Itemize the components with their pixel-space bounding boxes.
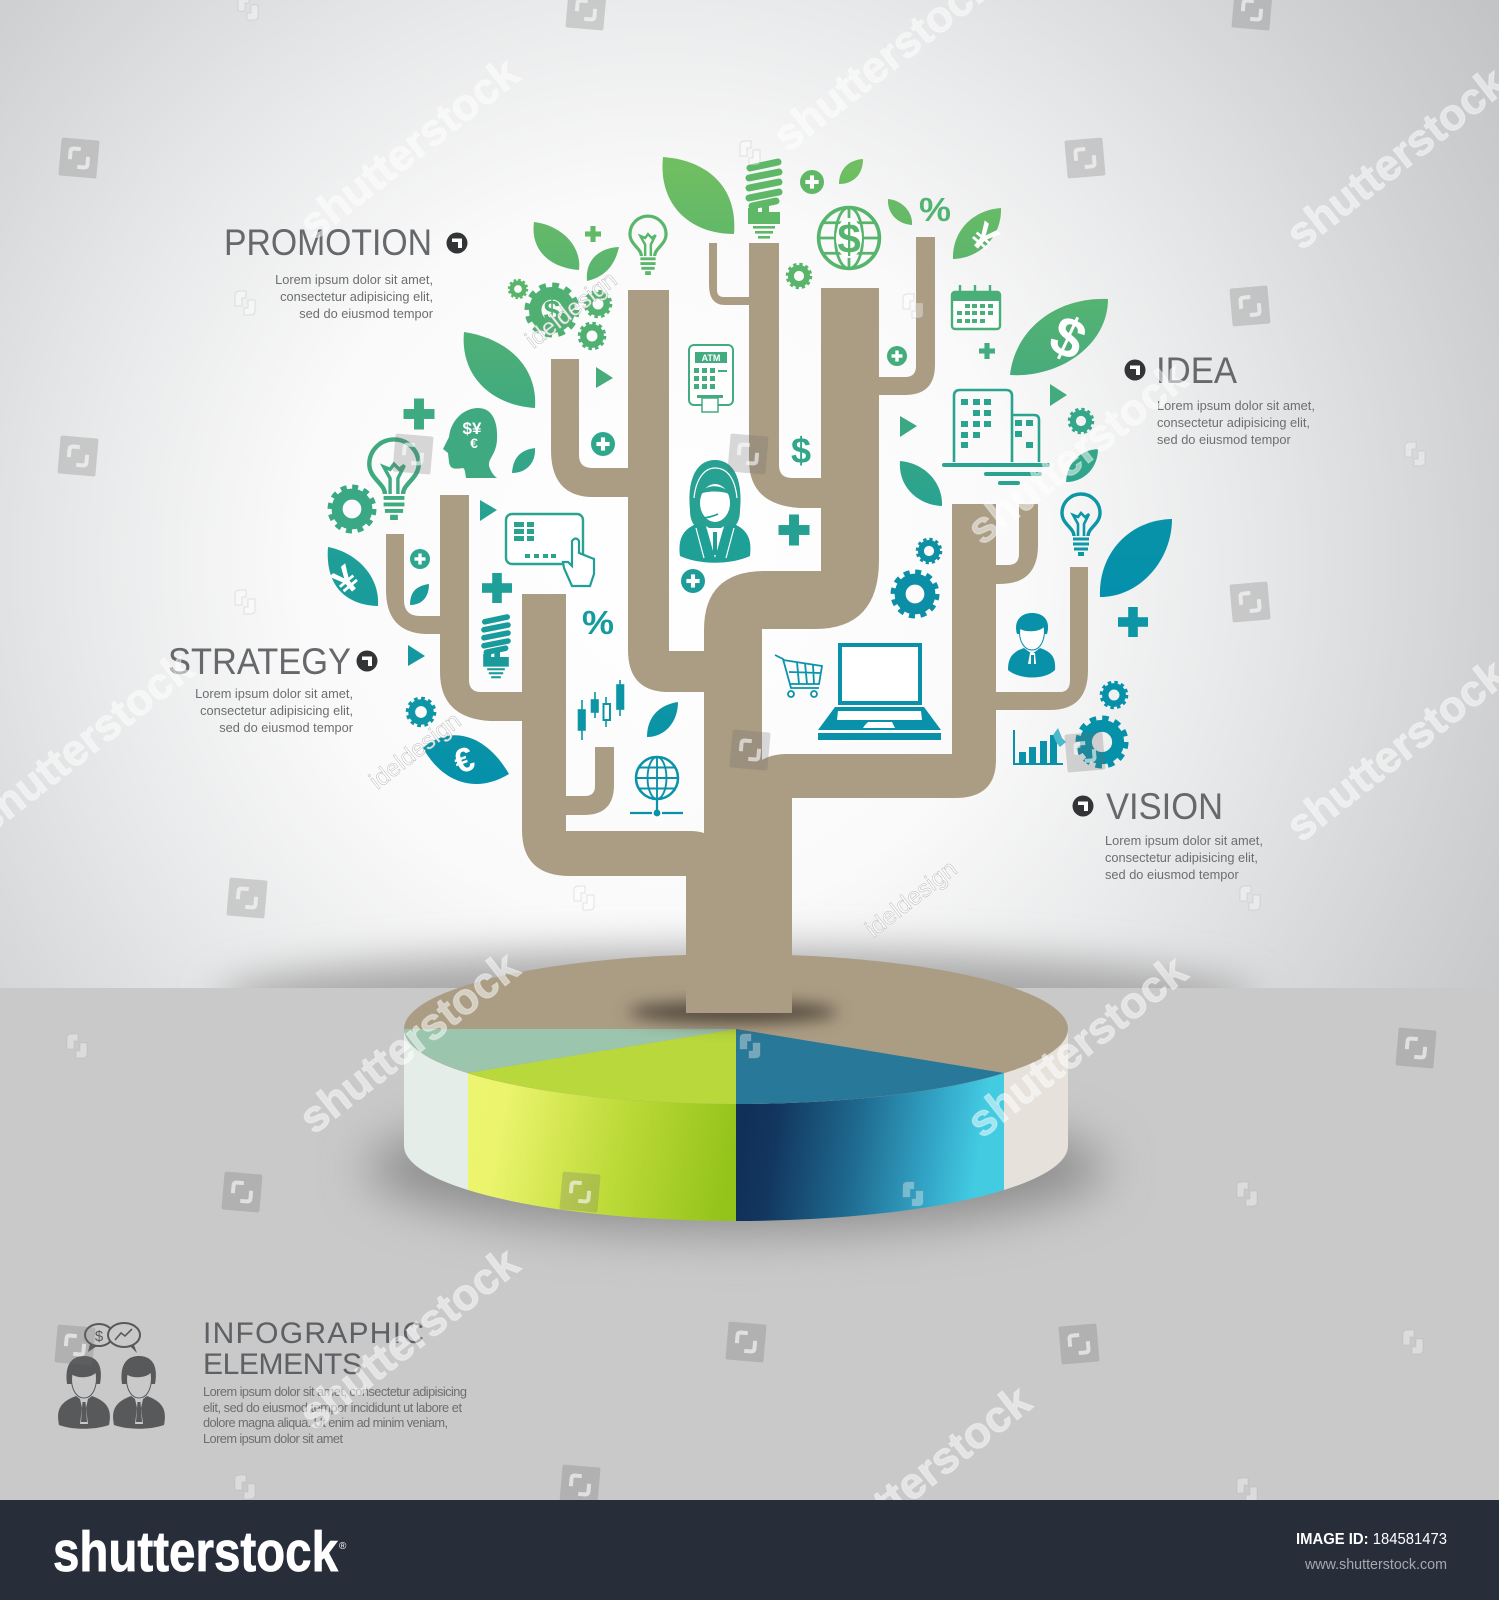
icon: money gear xyxy=(527,285,577,335)
label: vision: consectetur adipisicing elit, xyxy=(1105,850,1258,865)
icon: globe dollar xyxy=(819,208,879,268)
label: promotion: PROMOTION xyxy=(224,222,432,263)
gears xyxy=(330,264,1127,766)
triangles xyxy=(408,367,1067,666)
heading: infographic elements xyxy=(203,1317,424,1381)
icon: calendar xyxy=(952,285,1000,329)
text: infographic description: Lorem ipsum dolor sit amet xyxy=(203,1431,343,1446)
tree xyxy=(386,237,1088,1013)
pie side: blue xyxy=(736,1073,1004,1221)
icon: head with currency: $¥ xyxy=(463,419,482,438)
pie side: pale green xyxy=(404,1029,468,1190)
icon: shopping cart xyxy=(775,655,822,697)
trunk shadow xyxy=(628,1001,838,1023)
pie side: lime xyxy=(468,1073,736,1221)
label: strategy: consectetur adipisicing elit, xyxy=(200,703,353,718)
label: strategy: STRATEGY xyxy=(168,641,351,682)
text: infographic description: elit, sed do eiusmod tempor incididunt ut labore et xyxy=(203,1400,462,1415)
watermark text: shutterstock xyxy=(802,1376,1041,1577)
website: www.shutterstock.com xyxy=(1304,1556,1447,1573)
registered mark: ® xyxy=(339,1541,347,1552)
label: promotion: Lorem ipsum dolor sit amet, xyxy=(275,272,433,287)
icon: credit card with hand xyxy=(506,514,594,586)
watermark: ideldesign: ideldesign xyxy=(860,855,962,943)
icon: call centre woman xyxy=(680,460,750,563)
label: vision: VISION xyxy=(1106,786,1223,827)
watermark: ideldesign: ideldesign xyxy=(520,266,622,354)
text: infographic description: Lorem ipsum dolor sit amet, consectetur adipisicing xyxy=(203,1384,467,1399)
icon: ATM: ATM xyxy=(702,353,720,363)
wall background xyxy=(0,0,1499,988)
heading: infographic elements: ELEMENTS xyxy=(203,1348,362,1381)
icon: percent teal: % xyxy=(582,604,614,641)
heading: infographic elements: INFOGRAPHIC xyxy=(203,1317,424,1350)
label: promotion xyxy=(224,222,468,321)
label: idea xyxy=(1124,350,1315,447)
label: idea: IDEA xyxy=(1156,350,1237,391)
pie top sector: blue xyxy=(736,1029,1004,1104)
icon: head with currency: € xyxy=(470,435,478,451)
pie top sector: pale green xyxy=(404,1029,736,1073)
icon: candlestick chart xyxy=(578,680,624,740)
leaf symbols: ¥ xyxy=(962,215,1005,261)
icon: businessman xyxy=(1008,613,1055,678)
icon: laptop xyxy=(818,645,941,740)
leaf symbols xyxy=(325,215,1096,782)
label: vision: Lorem ipsum dolor sit amet, xyxy=(1105,833,1263,848)
icon: money gear: $ xyxy=(544,295,561,328)
icon: globe dollar: $ xyxy=(837,215,861,262)
label: promotion: sed do eiusmod tempor xyxy=(299,306,434,321)
label: strategy xyxy=(168,641,378,735)
label: idea: consectetur adipisicing elit, xyxy=(1157,415,1310,430)
label: strategy: sed do eiusmod tempor xyxy=(219,720,354,735)
icon: two businessmen with speech bubbles xyxy=(58,1323,165,1429)
pie side: cream xyxy=(1004,1029,1068,1190)
footer bar xyxy=(0,1500,1499,1600)
footer logo: shutterstock xyxy=(53,1520,338,1584)
wall shadow above floor xyxy=(210,926,1258,988)
icon: dollar sign: $ xyxy=(791,430,811,471)
label: idea: Lorem ipsum dolor sit amet, xyxy=(1157,398,1315,413)
icon: network globe xyxy=(630,757,683,816)
watermark text: shutterstock xyxy=(958,353,1197,554)
watermark text: shutterstock xyxy=(958,946,1197,1147)
icon: ATM xyxy=(689,345,733,412)
leaves xyxy=(328,157,1172,784)
icon: percent top: % xyxy=(919,191,951,228)
watermark text: shutterstock xyxy=(290,942,529,1143)
label: vision: sed do eiusmod tempor xyxy=(1105,867,1239,882)
icon: two businessmen with speech bubbles: $ xyxy=(95,1328,104,1345)
pie top xyxy=(404,954,1068,1104)
watermark: ideldesign xyxy=(364,266,962,943)
label: vision xyxy=(1072,786,1263,882)
leaf symbols: ¥ xyxy=(325,558,368,604)
label: strategy: Lorem ipsum dolor sit amet, xyxy=(195,686,353,701)
watermark text: shutterstock xyxy=(290,1238,529,1439)
bulbs xyxy=(369,162,1100,678)
leaf symbols: € xyxy=(449,740,480,782)
plus icons xyxy=(404,226,1148,637)
pie base xyxy=(366,954,1106,1232)
plus-in-circle icons xyxy=(410,170,907,593)
pie cast shadow xyxy=(366,1104,1106,1232)
icon: bar chart xyxy=(1013,728,1066,765)
image id: IMAGE ID: 184581473 xyxy=(1296,1531,1447,1548)
label: promotion: consectetur adipisicing elit, xyxy=(280,289,433,304)
icon: buildings xyxy=(942,390,1050,485)
watermark: ideldesign: ideldesign xyxy=(364,707,466,795)
text: infographic description: dolore magna aliqua. Ut enim ad minim veniam, xyxy=(203,1415,448,1430)
watermark text: shutterstock xyxy=(290,48,529,249)
leaf symbols: $ xyxy=(1041,302,1096,372)
label: idea: sed do eiusmod tempor xyxy=(1157,432,1291,447)
floor xyxy=(0,988,1499,1500)
icon: head with currency xyxy=(443,408,497,478)
pie top sector: lime xyxy=(468,1029,736,1104)
text: infographic description xyxy=(203,1384,467,1446)
